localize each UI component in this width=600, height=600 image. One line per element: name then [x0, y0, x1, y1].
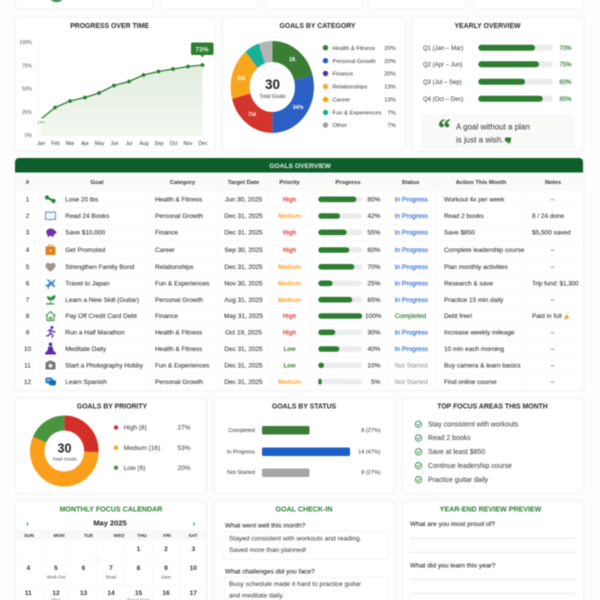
icon: house: [46, 312, 56, 320]
row 10: meditate daily: Health & Fitness: [155, 346, 202, 353]
heading: goals by priority: GOALS BY PRIORITY: [77, 404, 148, 410]
row 3: save $10,000: High: [283, 230, 296, 236]
table header row: Target Date: [228, 180, 260, 186]
row 1: lose 20 lbs: Workout 4x per week: [444, 196, 505, 204]
row 11: start a photography hobby: Start a Photography Hobby: [65, 362, 144, 370]
row 10: meditate daily: 10 min each morning: [444, 346, 505, 353]
row 4: get promoted: –: [551, 247, 555, 254]
row 3: save $10,000: $5,500 saved: [532, 230, 571, 236]
legend: categories: 13%: [384, 98, 396, 104]
icon: book: [46, 212, 56, 220]
row 5: strengthen family bond: –: [551, 264, 555, 271]
row 4: get promoted: Sep 30, 2025: [224, 247, 263, 254]
line chart: [19, 40, 208, 147]
answer box: challenges: [224, 577, 388, 600]
row 12: learn spanish: –: [551, 379, 555, 386]
heading: goals by status: GOALS BY STATUS: [272, 404, 337, 410]
row 2: read 24 books: Read 24 Books: [65, 213, 109, 220]
calendar month navigation: [26, 518, 196, 528]
calendar weekday header: SAT: [188, 533, 198, 538]
quarter bars: Q3 (Jul – Sep): [423, 80, 462, 86]
row 9: run a half marathon: –: [551, 330, 555, 336]
icon: meditating figure: [45, 342, 56, 354]
row 7: learn a new skill: Learn a New Skill (Guitar): [65, 297, 139, 304]
row 7: learn a new skill: Personal Growth: [155, 297, 203, 304]
row 10: meditate daily: Dec 31, 2025: [224, 346, 263, 353]
row 5: strengthen family bond: Dec 31, 2025: [224, 264, 263, 271]
donut centre: 30 total goals: 30: [265, 77, 280, 92]
heading: goals by category: GOALS BY CATEGORY: [279, 23, 356, 30]
calendar weekday header: WED: [114, 533, 125, 538]
row 3: save $10,000: Finance: [155, 230, 178, 236]
calendar weekday header: FRI: [163, 533, 171, 538]
quarter bars: 60%: [560, 80, 572, 86]
row 11: start a photography hobby: Not Started: [395, 362, 428, 370]
quarter bars: 70%: [560, 46, 572, 52]
row 5: strengthen family bond: In Progress: [395, 264, 429, 271]
row 10: meditate daily: 10: [24, 346, 31, 353]
row 3: save $10,000: [26, 228, 571, 237]
legend: categories: Personal Growth: [332, 59, 376, 65]
calendar weekday header: [16, 530, 206, 540]
row 6: travel to japan: Trip fund: $1,300: [532, 280, 579, 288]
row 2: read 24 books: In Progress: [395, 213, 429, 220]
row 5: strengthen family bond: [26, 263, 555, 272]
row 5: strengthen family bond: Relationships: [155, 264, 194, 271]
line chart: Apr: [81, 141, 89, 147]
table header row: Priority: [279, 180, 300, 186]
legend: priority: 53%: [177, 445, 191, 452]
icon: dumbbell: [45, 195, 56, 203]
row 7: learn a new skill: –: [551, 297, 555, 304]
row 4: get promoted: Career: [155, 247, 176, 254]
calendar dates: 7: [109, 565, 113, 572]
legend: categories: [323, 45, 396, 129]
line chart: May: [95, 141, 105, 147]
row 12: learn spanish: Learn Spanish: [65, 379, 107, 386]
line chart: 100%: [19, 40, 33, 46]
row 6: travel to japan: Fun & Experiences: [155, 280, 209, 288]
row 12: learn spanish: Find online course: [444, 379, 497, 386]
table header row: Status: [402, 180, 419, 186]
answer box: challenges: Busy schedule made it hard to practice guitar: [229, 581, 362, 588]
table header row: Action This Month: [456, 180, 507, 186]
row 11: start a photography hobby: 11: [24, 362, 31, 370]
row 10: meditate daily: In Progress: [395, 346, 429, 353]
row 10: meditate daily: [24, 342, 555, 354]
quote box: is just a wish.: [456, 136, 504, 144]
status bars: [227, 426, 381, 477]
donut centre: 30 total goals: Total Goals: [52, 456, 77, 462]
row 1: lose 20 lbs: 80%: [367, 196, 381, 204]
answer box: what went well: Saved more than planned!: [229, 547, 307, 554]
donut segment labels: 2/d: [237, 76, 245, 82]
line chart: Jun: [110, 141, 119, 147]
row 6: travel to japan: 6: [26, 280, 30, 288]
legend: categories: 13%: [384, 85, 396, 91]
quarter bars: 75%: [560, 62, 572, 68]
row 1: lose 20 lbs: 1: [26, 196, 30, 204]
calendar weekday header: SUN: [24, 533, 35, 538]
calendar dates: 3: [191, 546, 195, 553]
row 10: meditate daily: 40%: [367, 346, 381, 353]
quarter bars: [423, 45, 572, 103]
calendar dates: 13: [80, 590, 87, 597]
line chart: Aug: [140, 141, 149, 147]
row 11: start a photography hobby: 10%: [367, 362, 381, 370]
legend: categories: Health & Fitness: [332, 46, 375, 52]
icon: party popper: [564, 312, 571, 320]
legend: categories: Fun & Experiences: [332, 111, 382, 117]
icon: runner: [46, 326, 56, 338]
row 1: lose 20 lbs: In Progress: [395, 196, 429, 204]
calendar dates: 4: [26, 565, 30, 572]
row 3: save $10,000: Save $850: [444, 230, 475, 236]
calendar dates: Read: [106, 574, 117, 580]
row 3: save $10,000: 3: [26, 230, 30, 236]
row 9: run a half marathon: Run a Half Marathon: [65, 330, 125, 336]
row 9: run a half marathon: 30%: [367, 330, 381, 336]
row 9: run a half marathon: Health & Fitness: [155, 330, 202, 336]
callout: 73%: 73%: [195, 46, 209, 54]
legend: priority: 27%: [177, 425, 191, 432]
panel: goals by priority: [16, 398, 206, 494]
line chart: Oct: [170, 141, 178, 147]
legend: categories: Finance: [332, 72, 353, 78]
row 8: pay off credit card debt: May 31, 2025: [224, 313, 263, 320]
row 1: lose 20 lbs: [26, 195, 555, 204]
donut chart: category: [240, 52, 304, 122]
line chart: Dec: [199, 141, 208, 147]
legend: categories: Other: [332, 123, 347, 129]
row 2: read 24 books: 42%: [367, 213, 381, 220]
row 2: read 24 books: Personal Growth: [155, 213, 203, 220]
calendar dates: 11: [25, 590, 32, 597]
row 7: learn a new skill: [26, 295, 555, 304]
row 2: read 24 books: 8 / 24 done: [532, 213, 565, 220]
legend: categories: 20%: [384, 59, 396, 65]
calendar dates: Work Out: [47, 574, 66, 580]
row 8: pay off credit card debt: 100%: [365, 313, 382, 320]
row 12: learn spanish: Dec 31, 2025: [224, 379, 263, 386]
question: what went well: What went well this month?: [225, 522, 306, 530]
panel: monthly focus calendar: [16, 500, 206, 600]
calendar dates: 2: [164, 546, 168, 553]
heading: year-end review preview: YEAR-END REVIEW PREVIEW: [440, 506, 542, 514]
row 3: save $10,000: Dec 31, 2025: [224, 230, 263, 236]
row 4: get promoted: 60%: [367, 247, 381, 254]
row 12: learn spanish: 5%: [371, 379, 381, 386]
calendar month navigation: May 2025: [93, 518, 127, 528]
donut chart: priority: [37, 423, 91, 479]
row 1: lose 20 lbs: High: [283, 198, 296, 204]
row 10: meditate daily: Meditate Daily: [65, 346, 107, 353]
row 5: strengthen family bond: Plan monthly activities: [444, 264, 508, 271]
donut segment labels: 18.: [289, 57, 297, 63]
donut centre: 30 total goals: 30: [58, 442, 71, 456]
calendar dates: 1: [137, 546, 141, 553]
panel: yearly overview: [412, 18, 584, 152]
row 5: strengthen family bond: Medium: [278, 265, 301, 271]
answer box: challenges: and meditate daily.: [229, 592, 284, 600]
checklist: [415, 421, 519, 484]
heading: monthly focus calendar: MONTHLY FOCUS CALENDAR: [60, 506, 162, 514]
status bars: 8 (27%): [361, 428, 381, 434]
calendar dates: Save: [161, 574, 172, 580]
line chart: Jan: [37, 141, 45, 147]
answer box: what went well: Stayed consistent with workouts and reading.: [229, 536, 361, 542]
row 1: lose 20 lbs: Jun 30, 2025: [225, 196, 263, 204]
row 9: run a half marathon: Oct 19, 2025: [225, 330, 262, 336]
row 11: start a photography hobby: Dec 31, 2025: [224, 362, 263, 370]
row 2: read 24 books: 2: [26, 213, 30, 220]
status bars: In Progress: [227, 450, 255, 456]
line chart: Feb: [51, 141, 60, 147]
table header row: [16, 172, 584, 191]
row 8: pay off credit card debt: Pay Off Credit Card Debt: [65, 313, 137, 320]
legend: categories: 20%: [384, 46, 396, 52]
heading: goal check-in: GOAL CHECK-IN: [275, 506, 333, 514]
quote box: A goal without a plan: [456, 122, 530, 132]
row 6: travel to japan: Nov 30, 2025: [224, 280, 263, 288]
legend: categories: Career: [332, 98, 350, 104]
checklist: Practice guitar daily: [428, 477, 489, 484]
checklist: Continue leadership course: [428, 463, 512, 470]
line chart: 75%: [22, 64, 33, 70]
row 10: meditate daily: Low: [284, 347, 296, 353]
row 12: learn spanish: Medium: [278, 380, 301, 386]
row 8: pay off credit card debt: Completed: [395, 313, 427, 320]
calendar weekday header: MON: [54, 533, 65, 538]
row 9: run a half marathon: [26, 326, 555, 338]
row 7: learn a new skill: In Progress: [395, 297, 429, 304]
row 10: meditate daily: –: [551, 346, 555, 353]
donut segment labels: [237, 57, 304, 118]
calendar dates: 8: [137, 565, 141, 572]
icon: briefcase: [46, 245, 56, 255]
row 5: strengthen family bond: 70%: [367, 264, 381, 271]
row 4: get promoted: In Progress: [395, 247, 429, 254]
quote box: “: [438, 115, 450, 142]
checklist: Read 2 books: [428, 435, 471, 442]
table header row: Progress: [335, 180, 361, 186]
checklist: Save at least $850: [428, 449, 485, 456]
calendar dates: 17: [190, 590, 197, 597]
quarter bars: Q1 (Jan – Mar): [423, 46, 463, 52]
calendar dates: 9: [164, 565, 168, 572]
table header row: Notes: [545, 180, 561, 186]
donut segment labels: 34%: [292, 105, 304, 111]
heading: top focus areas: TOP FOCUS AREAS THIS MONTH: [437, 404, 548, 410]
legend: priority: Medium (16): [124, 445, 160, 452]
legend: categories: 20%: [384, 72, 396, 78]
quarter bars: 85%: [560, 97, 572, 103]
calendar dates: [25, 546, 197, 600]
panel: goals overview table: [15, 158, 584, 390]
quarter bars: Q2 (Apr – Jun): [423, 62, 462, 68]
question: learned: What did you learn this year?: [410, 562, 496, 569]
row 11: start a photography hobby: Fun & Experiences: [155, 362, 209, 370]
row 7: learn a new skill: 65%: [367, 297, 381, 304]
row 7: learn a new skill: Aug 31, 2025: [224, 297, 263, 304]
calendar dates: 6: [82, 565, 86, 572]
row 9: run a half marathon: 9: [26, 330, 30, 336]
icon: sprout: [46, 295, 56, 304]
row 7: learn a new skill: 7: [26, 297, 30, 304]
row 6: travel to japan: Medium: [278, 282, 301, 288]
row 5: strengthen family bond: 5: [26, 264, 30, 271]
row 7: learn a new skill: Medium: [278, 298, 301, 304]
quarter bars: Q4 (Oct – Dec): [423, 97, 463, 103]
row 4: get promoted: 4: [26, 247, 30, 254]
row 8: pay off credit card debt: Finance: [155, 313, 178, 320]
row 9: run a half marathon: Increase weekly mileage: [444, 330, 515, 336]
row 6: travel to japan: 25%: [367, 280, 381, 288]
line chart: 13%: [37, 119, 45, 124]
row 8: pay off credit card debt: Debt free!: [444, 313, 472, 320]
line chart: 25%: [22, 110, 33, 116]
legend: priority: High (8): [124, 425, 147, 432]
legend: priority: 20%: [177, 465, 191, 472]
calendar dates: 12: [52, 590, 60, 597]
donut centre: 30 total goals: [260, 77, 286, 100]
line chart: Nov: [184, 141, 193, 147]
heading: yearly overview: YEARLY OVERVIEW: [454, 23, 521, 30]
panel: top focus areas: [402, 398, 584, 494]
legend: categories: 7%: [387, 111, 396, 117]
calendar dates: 14: [107, 590, 115, 597]
legend: categories: 7%: [387, 123, 396, 129]
row 8: pay off credit card debt: High: [283, 314, 296, 320]
question: proud of: What are you most proud of?: [410, 521, 495, 528]
table title bar: GOALS OVERVIEW: [269, 163, 331, 170]
panel: year-end review preview: [402, 500, 584, 600]
legend: priority: Low (6): [124, 465, 145, 472]
legend: priority: [114, 425, 191, 472]
checklist: Stay consistent with workouts: [428, 422, 519, 428]
row 2: read 24 books: Dec 31, 2025: [224, 213, 263, 220]
row 9: run a half marathon: In Progress: [395, 330, 429, 336]
row 3: save $10,000: In Progress: [395, 230, 429, 236]
table header row: Goal: [91, 180, 104, 186]
row 11: start a photography hobby: –: [551, 362, 555, 370]
panel: progress over time: [16, 18, 216, 152]
row 6: travel to japan: [26, 279, 579, 289]
row 12: learn spanish: Not Started: [395, 379, 428, 386]
row 4: get promoted: Complete leadership course: [444, 247, 525, 254]
status bars: Completed: [228, 428, 255, 434]
row 4: get promoted: High: [283, 248, 296, 254]
icon: heart: [46, 263, 56, 272]
row 6: travel to japan: Research & save: [444, 280, 493, 288]
row 11: start a photography hobby: [24, 361, 555, 370]
icon: chat bubbles: [45, 378, 56, 386]
table header row: Category: [170, 180, 196, 186]
row 11: start a photography hobby: Low: [284, 364, 296, 370]
icon: airplane: [45, 279, 56, 289]
row 8: pay off credit card debt: Paid in full: [532, 313, 562, 320]
row 1: lose 20 lbs: Lose 20 lbs: [65, 196, 98, 204]
answer box: what went well: [224, 532, 388, 560]
heading: progress over time: PROGRESS OVER TIME: [70, 23, 149, 30]
panel: goals by status: [214, 398, 396, 494]
row 1: lose 20 lbs: –: [551, 196, 555, 204]
row 2: read 24 books: [26, 212, 565, 220]
icon: piggy bank: [46, 228, 56, 237]
panel: goal check-in: [214, 500, 396, 600]
row 11: start a photography hobby: Buy camera & learn basics: [444, 362, 521, 370]
quote box: [422, 115, 574, 148]
calendar weekday header: THU: [137, 533, 147, 538]
calendar month navigation: ‹: [26, 519, 29, 528]
table title bar: [15, 158, 583, 172]
donut centre: 30 total goals: [52, 442, 77, 462]
row 2: read 24 books: Read 2 books: [444, 213, 484, 220]
status bars: Not Started: [227, 470, 255, 476]
row 3: save $10,000: Save $10,000: [65, 230, 105, 236]
line chart: Sep: [155, 141, 164, 147]
calendar month navigation: ›: [193, 519, 196, 528]
row 9: run a half marathon: High: [283, 330, 296, 336]
row 3: save $10,000: 55%: [367, 230, 381, 236]
line chart: Mar: [66, 141, 75, 147]
row 6: travel to japan: Travel to Japan: [65, 280, 110, 288]
calendar dates: 16: [162, 590, 170, 597]
question: challenges: What challenges did you face?: [225, 568, 315, 575]
row 8: pay off credit card debt: 8: [26, 313, 30, 320]
calendar weekday header: TUE: [84, 533, 93, 538]
calendar dates: 15: [135, 590, 142, 597]
row 7: learn a new skill: Practice 15 min daily: [444, 297, 504, 304]
donut segment labels: 7/d: [248, 112, 256, 118]
icon: camera: [46, 361, 56, 370]
row 1: lose 20 lbs: Health & Fitness: [155, 196, 202, 204]
line chart: Jul: [126, 141, 132, 147]
row 8: pay off credit card debt: [26, 312, 571, 320]
row 12: learn spanish: Personal Growth: [155, 379, 203, 386]
calendar dates: 10: [190, 565, 197, 572]
donut centre: 30 total goals: Total Goals: [260, 94, 286, 100]
row 4: get promoted: [26, 245, 555, 255]
row 4: get promoted: Get Promoted: [65, 247, 106, 254]
row 2: read 24 books: Medium: [278, 214, 301, 220]
callout: 73%: [191, 42, 214, 58]
line chart: 50%: [22, 86, 33, 92]
row 5: strengthen family bond: Strengthen Family Bond: [65, 264, 135, 271]
row 6: travel to japan: In Progress: [395, 280, 429, 288]
status bars: 8 (27%): [361, 470, 381, 476]
row 12: learn spanish: 12: [24, 379, 31, 386]
calendar dates: 5: [54, 565, 58, 572]
panel: goals by category: [222, 18, 406, 152]
top summary cards: [16, 0, 584, 9]
row 12: learn spanish: [24, 378, 555, 386]
table header row: #: [26, 180, 30, 186]
status bars: 14 (47%): [358, 450, 381, 456]
legend: categories: Relationships: [332, 85, 367, 91]
line chart: 0%: [25, 133, 33, 139]
